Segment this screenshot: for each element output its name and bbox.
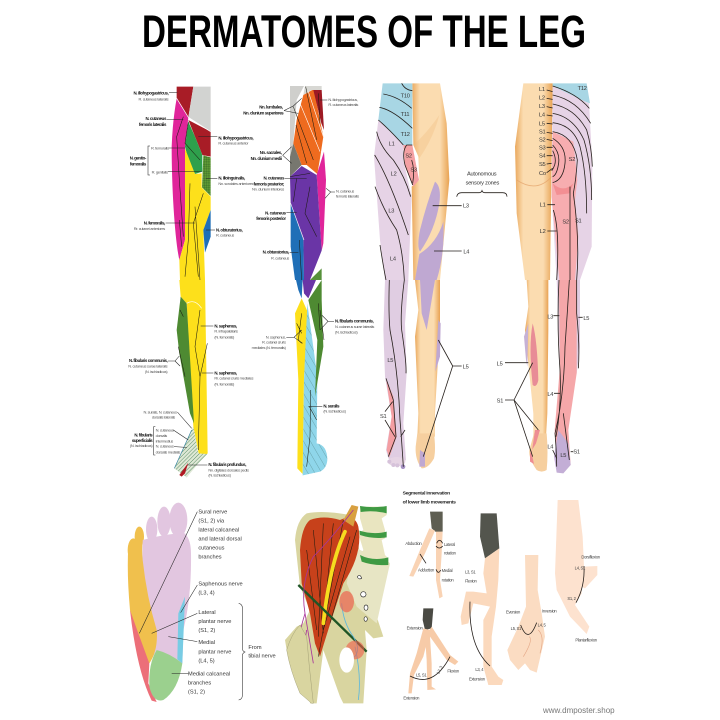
labels: dermatomes posterior upper: Co	[539, 171, 546, 177]
heading: of lower limb movements	[403, 500, 456, 506]
leg: anterior upper	[374, 83, 462, 280]
movement: knee flexion and extension: Extension	[469, 677, 486, 682]
leg: posterior lower right: S1	[573, 450, 580, 456]
label: N. iliohypogastricus R. cutaneus lateralis: N. iliohypogastricus,	[133, 90, 168, 95]
labels: dermatomes posterior upper: L5	[539, 121, 545, 127]
label: Nn. sacrales: Nn. clunium medii	[251, 156, 282, 161]
label: N. suralis	[308, 403, 347, 414]
label: N. cutaneus femoris lateralis: N. cutaneus	[145, 116, 167, 121]
label: N. obturatorius: R. cutaneus	[216, 233, 234, 238]
movement: dorsiflexion and plantarflexion: S1, 2	[567, 596, 577, 601]
label: N. iliohypogastricus R. cutaneus lateralis: R. cutaneus lateralis	[139, 97, 169, 102]
label: N. saphenus infrapatellaris: R. infrapatellaris	[214, 329, 238, 334]
label: N. iliohypogastricus posterior: N. iliohypogastricus,	[328, 97, 358, 102]
labels: dermatomes anterior upper: L3	[388, 208, 394, 214]
label: N. cutaneus femoris lateralis posterior: N. cutaneus	[336, 189, 354, 194]
label: N. ilioinguinalis: N. ilioinguinalis,	[218, 175, 245, 180]
movement: hip extension and flexion: Extension	[403, 695, 420, 700]
label: N. fibularis superficialis	[130, 427, 188, 455]
leg: posterior lower right: L4	[547, 392, 553, 398]
label: N. genitofemoralis: N. genito-	[130, 155, 147, 160]
panel: anterior cutaneous nerve map upper	[130, 86, 359, 280]
label: N. fibularis communis: (N. ischiadicus)	[145, 369, 168, 374]
foot labels	[188, 510, 243, 695]
label: N. suralis: N. suralis	[323, 403, 340, 408]
movement: eversion and inversion: Eversion	[506, 609, 521, 614]
labels: dermatomes posterior upper: L2	[540, 229, 546, 235]
label: N. cutaneus femoris posterior: N. cutaneus	[263, 176, 285, 181]
foot labels: (S1, 2)	[198, 628, 215, 634]
label: N. cutaneus femoris posterior: Nn. clunium inferiores	[252, 187, 284, 192]
label: N. suralis dorsalis lateralis: dorsalis lateralis	[152, 415, 175, 420]
labels: dermatomes posterior upper: S2	[562, 220, 569, 226]
leg: posterior lower right: L3	[547, 314, 553, 320]
foot labels: (S1, 2) via	[198, 519, 225, 525]
label: autonomous sensory zones: Autonomous	[467, 171, 497, 177]
label: N. genitofemoralis: R. femoralis	[151, 145, 169, 150]
label: N. iliohypogastricus posterior	[320, 97, 358, 107]
foot labels: Lateral	[198, 610, 216, 616]
labels: dermatomes posterior upper: S5	[539, 162, 546, 168]
foot labels: (S1, 2)	[188, 689, 205, 695]
movement: hip extension and flexion: L2, 3	[436, 664, 444, 675]
movement: hip extension and flexion: Flexion	[447, 668, 460, 673]
leader lines: foot	[139, 512, 197, 673]
movement: knee flexion and extension: L3, 4	[475, 667, 484, 672]
label: N. fibularis profundus: N. fibularis profundus,	[208, 462, 246, 467]
label: N. obturatorius posterior: N. obturatorius,	[263, 250, 289, 255]
leg: posterior lower leg	[295, 280, 327, 475]
labels: dermatomes anterior upper: L2	[391, 172, 397, 178]
leg: posterior lower left	[497, 280, 548, 472]
label: N. cutaneus femoris posterior	[252, 176, 307, 192]
leg: posterior lower right	[547, 280, 589, 473]
foot labels: (L3, 4)	[198, 590, 215, 596]
foot labels: plantar nerve	[198, 650, 231, 656]
leg: anterior lower left: S1	[380, 414, 387, 420]
labels: dermatomes posterior upper: L2	[539, 95, 545, 101]
label: Nn. lumbales	[243, 98, 302, 116]
labels: dermatomes anterior upper: T11	[401, 112, 409, 118]
labels: dermatomes posterior upper: S3	[539, 146, 546, 152]
labels: dermatomes anterior upper	[388, 94, 469, 263]
leg: anterior lower right	[415, 280, 469, 468]
labels: dermatomes posterior upper: L1	[539, 87, 545, 93]
label: Nn. lumbales: Nn. lumbales,	[259, 104, 283, 109]
label: N. obturatorius posterior: R. cutaneus	[271, 255, 289, 260]
label: N. iliohypogastricus R. cutaneus anterior: R. cutaneus anterior	[218, 140, 249, 145]
label: N. cutaneus femoris lateralis posterior: femoris lateralis	[336, 194, 359, 199]
leg: posterior lower left: L5	[497, 361, 503, 367]
movement: abduction and rotation: Lateral	[444, 542, 455, 547]
label: N. fibularis communis: N. cutaneus surae lateralis	[128, 363, 168, 368]
label: N. fibularis superficialis: (N. ischiadicus)	[130, 443, 153, 448]
label: N. cutaneus femoris posterior 2: femoris posterior	[256, 216, 286, 221]
label: N. fibularis communis	[128, 356, 180, 374]
heading: Segmental innervation	[403, 490, 450, 496]
label: N. saphenus cutanei cruris: (N. femoralis)	[214, 381, 235, 386]
label: N. fibularis communis posterior	[320, 315, 374, 335]
labels: dermatomes anterior upper: L4	[390, 257, 396, 263]
label: N. fibularis profundus: Nn. digitales dorsales pedis	[208, 467, 249, 472]
labels: dermatomes posterior upper: L4	[539, 113, 545, 119]
movement: abduction and rotation: Adduction	[418, 568, 435, 573]
labels: dermatomes posterior upper: S1	[575, 218, 582, 224]
bracket: from tibial nerve: From	[248, 645, 262, 651]
label: N. saphenus cutanei cruris: N. saphenus,	[214, 370, 237, 375]
label: N. iliohypogastricus R. cutaneus anterior: N. iliohypogastricus,	[218, 135, 253, 140]
label: N. fibularis superficialis: dorsalis	[156, 433, 167, 438]
labels: dermatomes posterior upper: S2	[569, 157, 575, 163]
label: N. cutaneus femoris posterior: femoris posterior;	[254, 181, 285, 186]
leg: posterior lower right: L5	[560, 453, 566, 459]
label: N. obturatorius: N. obturatorius,	[216, 227, 243, 232]
foot labels: Saphenous nerve	[198, 581, 243, 587]
foot labels: branches	[188, 680, 211, 686]
label: N. saphenus cutanei cruris: Rr. cutanei cruris mediales	[214, 376, 253, 381]
leg: anterior lower right: L5	[463, 364, 469, 370]
leg: anterior lower leg	[174, 280, 208, 477]
labels: dermatomes anterior upper: T10	[401, 94, 410, 100]
label: Nn. sacrales	[251, 147, 292, 163]
label: N. fibularis superficialis: intermedius	[156, 439, 173, 444]
label: N. cutaneus femoris lateralis: femoris lateralis	[139, 122, 167, 127]
movement: eversion and inversion	[506, 555, 557, 673]
foot labels: cutaneous	[198, 545, 225, 551]
labels: dermatomes posterior upper: T12	[578, 86, 587, 92]
bracket: from tibial nerve: tibial nerve	[248, 654, 276, 660]
panel: segmental innervation of lower limb movements	[403, 490, 601, 700]
label: N. saphenus infrapatellaris: (N. femoralis)	[214, 334, 235, 339]
leg: posterior lower right: L4	[547, 444, 553, 450]
heading	[403, 490, 456, 506]
label: N. fibularis communis posterior: N. fibularis communis,	[335, 319, 374, 324]
labels: dermatomes posterior upper: L1	[540, 203, 546, 209]
labels: dermatomes anterior upper: L4	[463, 249, 469, 255]
movement: eversion and inversion: Inversion	[542, 609, 557, 614]
foot labels: Sural nerve	[198, 510, 227, 516]
leg: anterior lower left	[380, 280, 408, 469]
label: N. saphenus infrapatellaris	[201, 323, 238, 339]
label: Nn. lumbales: Nn. clunium superiores	[243, 111, 284, 116]
label: N. iliohypogastricus R. cutaneus lateralis	[133, 90, 177, 102]
foot sole	[128, 503, 191, 702]
leg: posterior upper	[515, 83, 592, 280]
label: N. fibularis profundus: (N. ischiadicus)	[208, 473, 232, 478]
foot labels: (L4, 5)	[198, 659, 215, 665]
movement: abduction and rotation: Medial	[442, 568, 453, 573]
label: N. fibularis superficialis: superficialis	[132, 438, 153, 443]
movement: dorsiflexion and plantarflexion: Plantarflexion	[575, 638, 598, 643]
hip anatomy illustration	[285, 505, 390, 703]
leg: posterior lower right: L5	[583, 316, 589, 322]
movement: dorsiflexion and plantarflexion: Dorsiflexion	[581, 555, 601, 560]
movement: hip extension and flexion: L5, S1	[416, 673, 427, 678]
label: N. saphenus cutanei cruris	[202, 370, 253, 386]
leg: posterior lower left: S1	[497, 399, 503, 405]
movement: abduction and rotation: Abduction	[405, 541, 422, 546]
label: N. fibularis superficialis: dorsalis medialis	[156, 449, 180, 454]
labels: dermatomes anterior upper: S3	[410, 168, 417, 174]
label: N. genitofemoralis: R. genitalis	[152, 169, 168, 174]
foot labels: Medial calcaneal	[188, 671, 230, 677]
movement: knee flexion and extension	[461, 513, 503, 685]
movement: hip extension and flexion	[403, 608, 460, 700]
label: N. genitofemoralis: femoralis	[130, 161, 147, 166]
movement: knee flexion and extension: L3, S1	[465, 569, 476, 574]
label: N. saphenus cutanei cruris mediales posterior: mediales (N. femoralis)	[252, 345, 287, 350]
label: N. cutaneus femoris lateralis posterior	[325, 188, 359, 199]
movement: abduction and rotation: rotation	[442, 578, 454, 583]
label: N. fibularis communis posterior: (N. ischiadicus)	[335, 330, 358, 335]
label: N. cutaneus femoris lateralis	[139, 116, 183, 127]
website credit: www.dmposter.shop	[542, 706, 615, 715]
leg: anterior lower left: L5	[387, 358, 393, 364]
label: N. suralis: (N. ischiadicus)	[323, 409, 347, 414]
bracket: from tibial nerve	[239, 603, 276, 700]
movement: dorsiflexion and plantarflexion	[555, 500, 601, 643]
label: N. suralis dorsalis lateralis	[143, 409, 192, 428]
label: N. iliohypogastricus posterior: R. cutaneus lateralis	[328, 102, 358, 107]
label: N. femoralis: Rr. cutanei anteriores	[134, 226, 165, 231]
label: N. fibularis superficialis: N. fibularis	[134, 433, 153, 438]
label: N. genitofemoralis	[130, 145, 202, 175]
labels: dermatomes anterior upper: S2	[405, 154, 412, 160]
label: N. fibularis communis posterior: N. cutaneus surae lateralis	[335, 324, 374, 329]
movement: abduction and rotation	[405, 512, 457, 598]
foot labels: lateral calcaneal	[198, 527, 239, 533]
panel: foot and hip	[128, 503, 390, 703]
label: N. cutaneus femoris posterior 2	[256, 210, 297, 221]
movement: hip extension and flexion: Extension	[407, 625, 423, 630]
labels: dermatomes anterior upper: L3	[463, 204, 469, 210]
movement: eversion and inversion: L5, S1	[511, 626, 522, 631]
label: N. femoralis	[134, 220, 195, 231]
label: autonomous sensory zones	[457, 171, 507, 197]
label: N. fibularis superficialis: N. cutaneus	[156, 427, 174, 432]
labels: dermatomes posterior upper: S2	[539, 137, 546, 143]
label: N. ilioinguinalis: Nn. scrotales anteriores	[218, 181, 254, 186]
label: N. femoralis: N. femoralis,	[144, 220, 165, 225]
panel: dermatomes anterior and posterior upper	[374, 83, 592, 280]
leg: posterior thigh regions	[290, 86, 326, 280]
label: N. fibularis communis: N. fibularis communis,	[129, 358, 167, 363]
foot labels: and lateral dorsal	[198, 536, 242, 542]
leg: anterior thigh regions	[172, 87, 211, 280]
movement: knee flexion and extension: Flexion	[465, 578, 477, 583]
label: N. fibularis superficialis: N. cutaneus	[156, 444, 174, 449]
panel: dermatomes lower legs	[380, 280, 589, 473]
label: Nn. sacrales: Nn. sacrales,	[260, 150, 282, 155]
label: N. obturatorius posterior	[263, 250, 298, 260]
foot labels: plantar nerve	[198, 619, 231, 625]
labels: dermatomes anterior upper: T12	[401, 132, 410, 138]
label: autonomous sensory zones: sensory zones	[466, 180, 499, 186]
foot labels: branches	[198, 554, 222, 560]
labels: dermatomes posterior upper: S1	[539, 129, 546, 135]
movement: abduction and rotation: rotation	[444, 550, 457, 555]
movement: dorsiflexion and plantarflexion: L4, S1	[575, 565, 586, 570]
foot labels: Medial	[198, 640, 215, 646]
label: N. suralis dorsalis lateralis: N. suralis, N. cutaneus	[143, 409, 177, 414]
label: N. saphenus infrapatellaris: N. saphenus,	[214, 323, 237, 328]
label: N. saphenus cutanei cruris mediales posterior: R. cutanei cruris	[262, 340, 286, 345]
label: N. obturatorius	[206, 227, 243, 238]
label: N. fibularis profundus	[188, 462, 249, 478]
labels: dermatomes posterior upper: L3	[539, 104, 545, 110]
label: N. ilioinguinalis	[206, 175, 254, 186]
label: N. cutaneus femoris posterior 2: N. cutaneus	[265, 210, 287, 215]
label: N. saphenus cutanei cruris mediales posterior: N. saphenus,	[266, 334, 286, 339]
label: N. saphenus cutanei cruris mediales posterior	[252, 330, 303, 350]
labels: dermatomes posterior upper	[539, 86, 587, 235]
labels: dermatomes anterior upper: L1	[389, 142, 395, 148]
panel: cutaneous nerve map lower	[128, 280, 374, 478]
label: N. iliohypogastricus R. cutaneus anterior	[198, 135, 253, 145]
labels: dermatomes posterior upper: S4	[539, 154, 546, 160]
movement: eversion and inversion: L4, 5	[538, 623, 547, 628]
